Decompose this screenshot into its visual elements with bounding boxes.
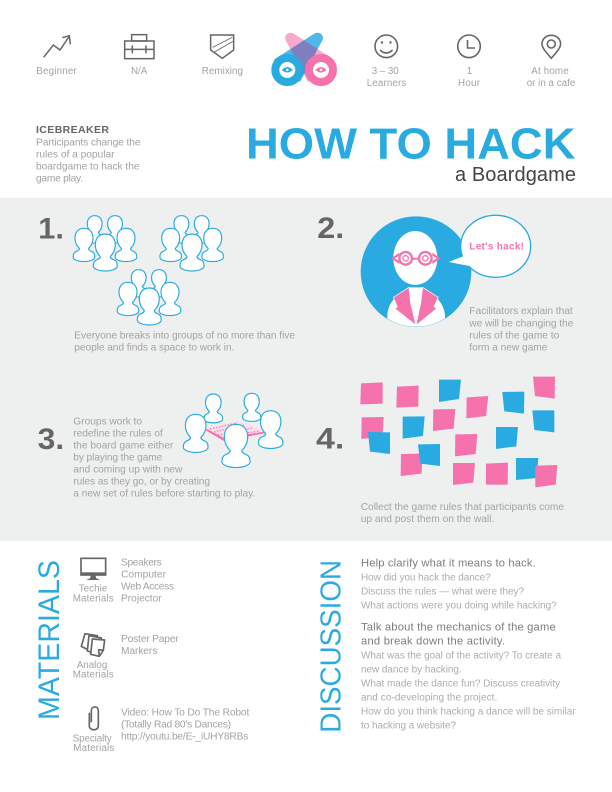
- list: specialty items: [121, 707, 249, 742]
- title: HOW TO HACK: [246, 120, 576, 168]
- label: specialty materials: Materials: [73, 743, 114, 754]
- step 1 text: Everyone breaks into groups of no more than five: [74, 330, 295, 341]
- icon: clock: [458, 35, 480, 58]
- discussion heading: DISCUSSION: [316, 560, 348, 733]
- list: techie items: Speakers: [121, 558, 162, 569]
- icon: skill level arrow: [44, 36, 70, 57]
- discussion block 2: What made the dance fun? Discuss creativity: [361, 679, 560, 690]
- step 1: 1.: [38, 212, 64, 245]
- list: techie items: [121, 558, 174, 605]
- label: analog materials: Analog: [77, 660, 107, 671]
- label: N/A: N/A: [131, 66, 148, 77]
- step 4: [316, 377, 564, 525]
- discussion block 1: What actions were you doing while hacking?: [361, 601, 557, 612]
- label: learners: Learners: [367, 78, 406, 89]
- list: techie items: Projector: [121, 594, 162, 605]
- label: Remixing: Remixing: [202, 66, 243, 77]
- gray steps band: [0, 198, 612, 541]
- people groups: [73, 216, 224, 325]
- label: analog materials: [73, 660, 114, 681]
- label: techie materials: [73, 583, 114, 605]
- discussion block 2: [361, 622, 576, 732]
- label: analog materials: Materials: [73, 670, 114, 681]
- materials heading: MATERIALS: [33, 560, 66, 720]
- step 2 text: rules of the game to: [469, 330, 560, 341]
- label: location: At home: [531, 66, 569, 77]
- discussion block 2: new dance by hacking.: [361, 665, 462, 676]
- label: time: [458, 66, 481, 89]
- step 3 text: rules as they go, or by creating: [73, 476, 210, 487]
- icon: paperclip: [89, 707, 98, 730]
- step 2: 2.: [317, 212, 344, 245]
- list: specialty items: (Totally Rad 80's Dances): [121, 719, 231, 730]
- icebreaker intro: rules of a popular: [36, 150, 115, 161]
- discussion block 2: and break down the activity.: [361, 636, 505, 648]
- step 4 text: Collect the game rules that participants come: [361, 502, 564, 513]
- subtitle: a Boardgame: [455, 164, 576, 186]
- step 3 text: a new set of rules before starting to play.: [73, 488, 255, 499]
- step 4: 4.: [316, 422, 344, 455]
- speech text: Let's hack!: [469, 242, 524, 252]
- label: time: 1: [467, 66, 472, 77]
- list: specialty items: Video: How To Do The Robot: [121, 707, 249, 718]
- step 2: [317, 212, 574, 353]
- label: learners: [367, 66, 406, 89]
- step 1 text: people and finds a space to work in.: [74, 342, 234, 353]
- label: learners: 3 – 30: [372, 66, 399, 77]
- step 4 text: [361, 502, 564, 525]
- discussion block 1: Discuss the rules — what were they?: [361, 587, 524, 598]
- icebreaker intro: boardgame to hack the: [36, 162, 140, 173]
- step 3: 3.: [38, 423, 64, 456]
- step 2 text: form a new game: [469, 342, 548, 353]
- discussion block 2: and co-developing the project.: [361, 693, 497, 704]
- icebreaker intro: game play.: [36, 174, 83, 185]
- icebreaker intro: [36, 124, 141, 185]
- list: specialty items: http://youtu.be/E-_iUHY8RBs: [121, 731, 248, 742]
- label: techie materials: Techie: [79, 583, 108, 594]
- label: location: or in a cafe: [527, 78, 576, 89]
- icon: map pin: [542, 35, 561, 58]
- discussion block 2: What was the goal of the activity? To create a: [361, 651, 561, 662]
- discussion block 2: How do you think hacking a dance will be similar: [361, 707, 576, 718]
- discussion block 2: to hacking a website?: [361, 721, 456, 732]
- step 3 text: by playing the game: [73, 452, 163, 463]
- illustration: people round a board game: [183, 393, 283, 468]
- icon: smiley: [375, 35, 398, 58]
- step 3 text: [73, 416, 255, 499]
- list: analog items: [121, 634, 179, 657]
- label: location: [527, 66, 576, 89]
- step 1 text: [74, 330, 295, 353]
- label: specialty materials: [73, 734, 114, 754]
- step 3 text: Groups work to: [73, 416, 142, 427]
- list: techie items: Web Access: [121, 582, 174, 593]
- step 3: [38, 393, 283, 499]
- step 1: [38, 212, 295, 353]
- icebreaker intro: ICEBREAKER: [36, 124, 109, 136]
- label: techie materials: Materials: [73, 594, 114, 605]
- logo: two eyes: [274, 33, 334, 82]
- icon: papers: [81, 634, 105, 656]
- list: analog items: Markers: [121, 646, 157, 657]
- discussion block 1: How did you hack the dance?: [361, 573, 491, 584]
- step 2 text: [468, 306, 574, 353]
- icon: shield: [211, 35, 234, 58]
- icebreaker intro: Participants change the: [36, 138, 141, 149]
- sticky notes: [360, 377, 557, 487]
- facilitator illustration: [361, 215, 531, 328]
- step 3 text: the board game either: [73, 440, 174, 451]
- discussion block 1: [361, 558, 557, 612]
- step 2 text: we will be changing the: [468, 318, 574, 329]
- step 2 text: Facilitators explain that: [469, 306, 573, 317]
- icon: briefcase: [125, 35, 154, 59]
- label: Beginner: Beginner: [36, 66, 77, 77]
- list: analog items: Poster Paper: [121, 634, 179, 645]
- step 4 text: up and post them on the wall.: [361, 514, 494, 525]
- discussion block 2: Talk about the mechanics of the game: [361, 622, 556, 634]
- step 3 text: redefine the rules of: [73, 428, 163, 439]
- label: time: Hour: [458, 78, 481, 89]
- label: specialty materials: Specialty: [73, 734, 112, 745]
- discussion block 1: Help clarify what it means to hack.: [361, 558, 536, 570]
- list: techie items: Computer: [121, 570, 167, 581]
- step 3 text: and coming up with new: [73, 464, 183, 475]
- icon: monitor: [81, 558, 106, 580]
